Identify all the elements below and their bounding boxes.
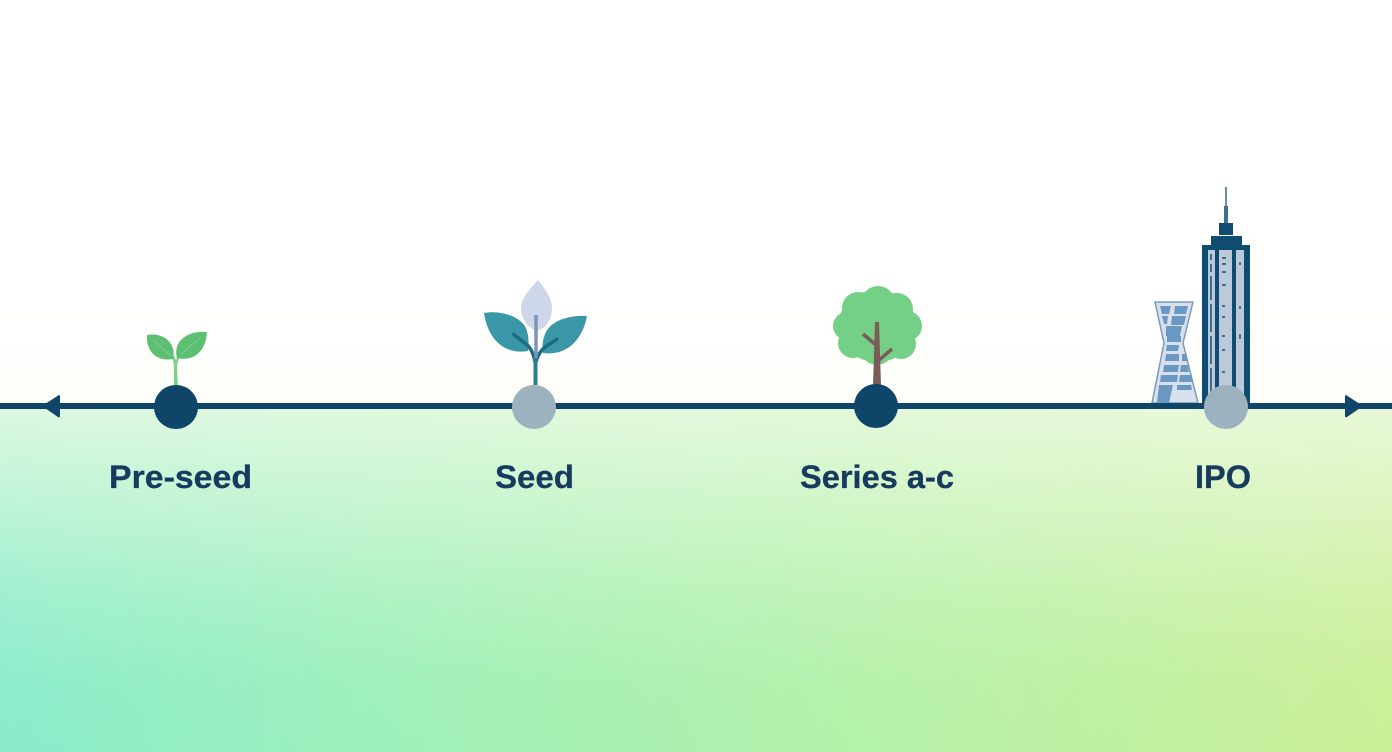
label: IPO: IPO xyxy=(1195,459,1251,495)
icon: young plant xyxy=(484,280,587,385)
small hourglass tower xyxy=(1152,302,1198,403)
node: series a-c xyxy=(854,384,898,428)
icon: sprout xyxy=(147,332,207,386)
label: seed: Seed xyxy=(495,459,574,495)
node: pre-seed xyxy=(154,385,198,429)
label: series a-c: Series a-c xyxy=(800,459,954,495)
tall tower xyxy=(1202,187,1250,406)
icon: tree xyxy=(833,286,922,386)
node: IPO xyxy=(1204,385,1248,429)
arrow: left xyxy=(42,395,60,417)
arrow: right xyxy=(1345,395,1363,417)
label: pre-seed: Pre-seed xyxy=(109,459,252,495)
timeline axis xyxy=(0,403,1392,409)
icon: skyscrapers xyxy=(1152,187,1250,406)
node: seed xyxy=(512,385,556,429)
